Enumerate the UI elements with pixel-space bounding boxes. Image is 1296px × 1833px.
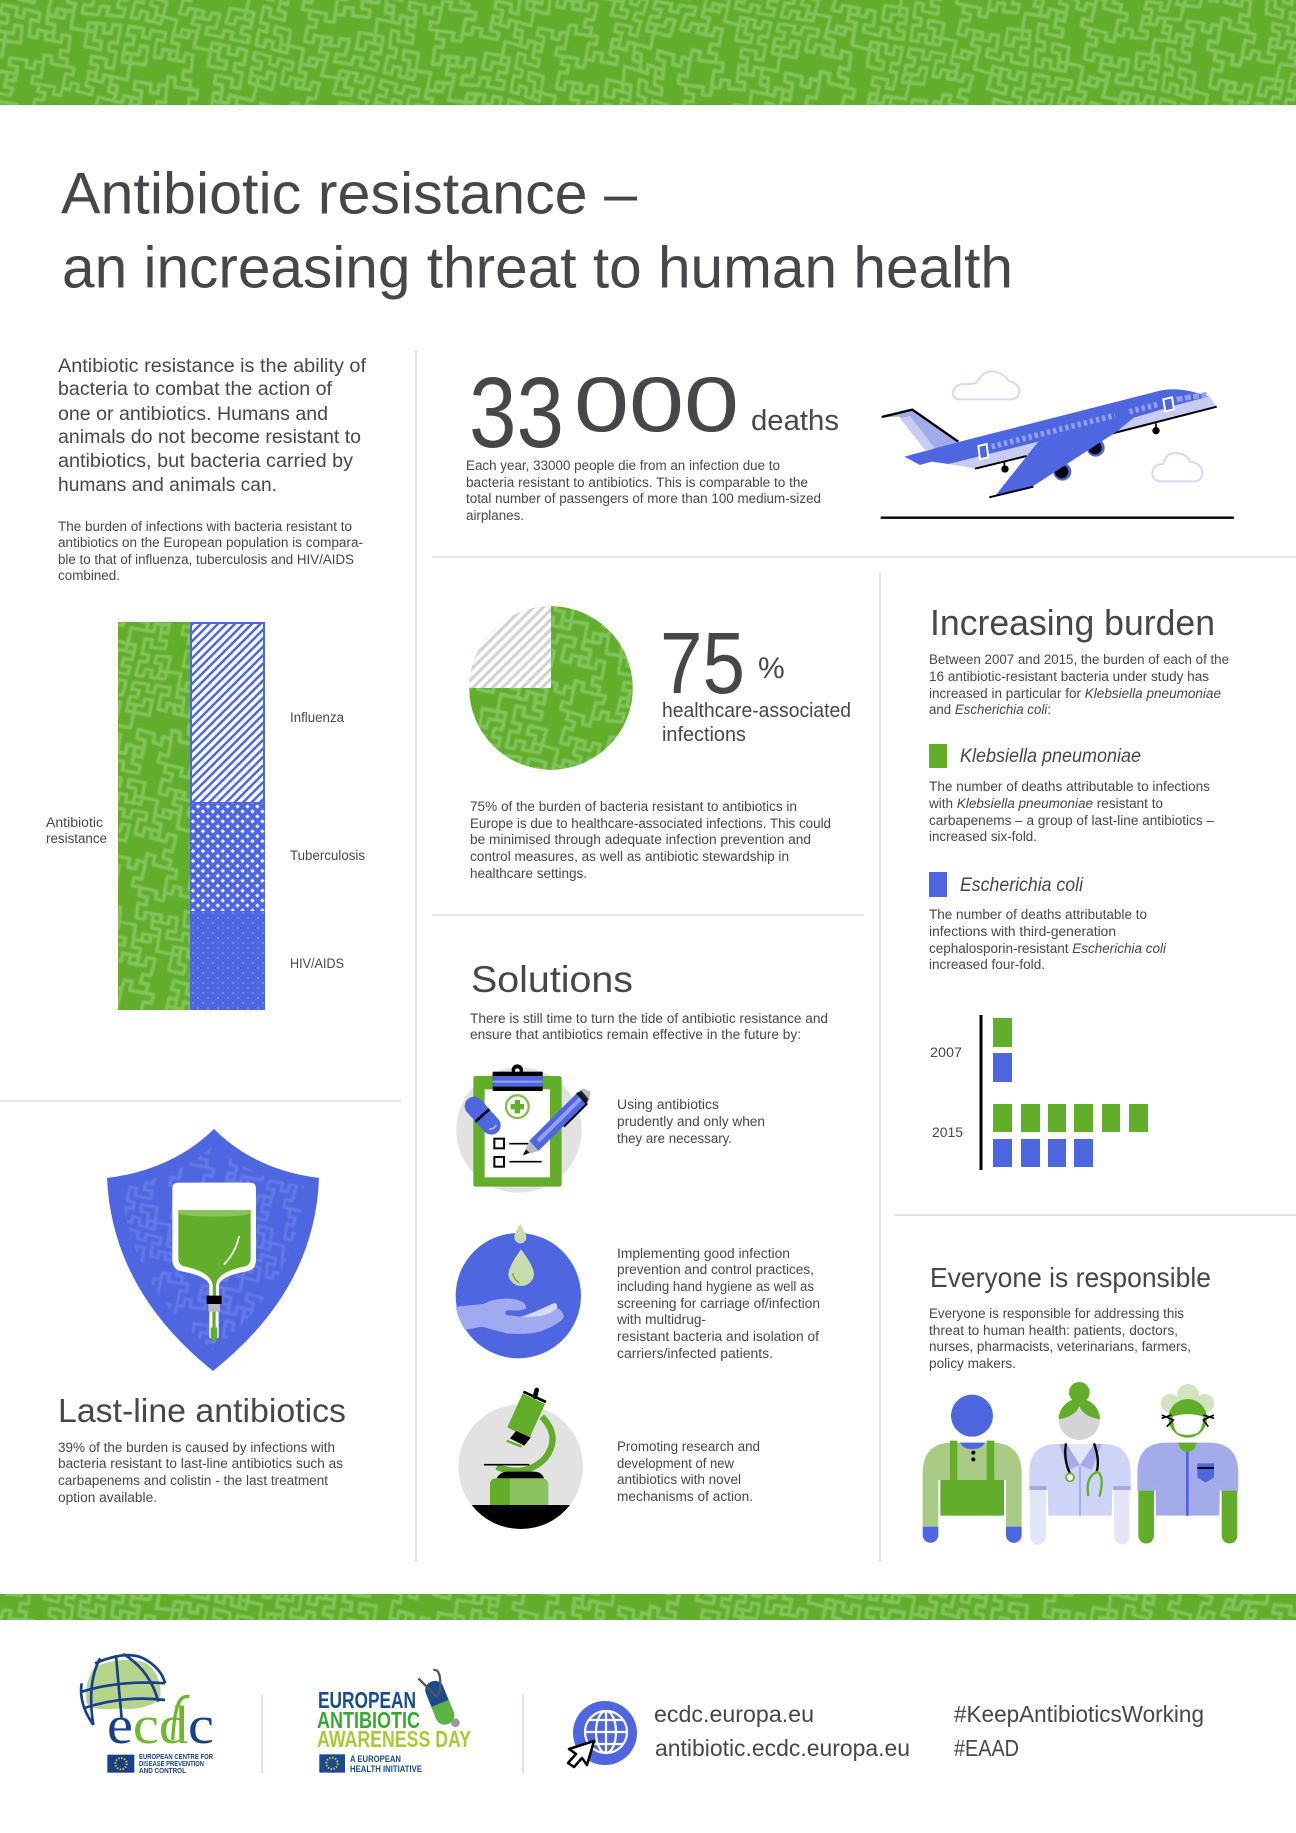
text: prudent use: prudently and only when: [617, 1114, 765, 1129]
logo: ECDC: EUROPEAN CENTRE FOR: [139, 1754, 213, 1761]
everyone text: nurses, pharmacists, veterinarians, farmers,: [929, 1339, 1191, 1354]
bar chart: 2007 vs 2015: 2007: [930, 1045, 962, 1060]
text: research: development of new: [617, 1456, 734, 1471]
title: an increasing threat to human health: [62, 236, 1013, 300]
icon: shield with IV bag: [107, 1129, 319, 1371]
logo: European Antibiotic Awareness Day: [317, 1670, 471, 1775]
healthcare infections text: healthcare settings.: [470, 866, 587, 881]
intro text: one or antibiotics. Humans and: [58, 403, 328, 425]
stacked burden chart: [46, 622, 365, 1010]
deaths text: [466, 458, 821, 523]
hashtags: [954, 1701, 1204, 1761]
big number: 33000 deaths: deaths: [751, 405, 839, 437]
intro text: bacteria to combat the action of: [58, 378, 333, 400]
big number: 33000 deaths: [469, 357, 839, 469]
big number: 33000 deaths: 33: [469, 357, 564, 469]
title: [61, 162, 1013, 300]
text: infection prevention: [616, 1246, 820, 1361]
footer pattern band: [0, 1594, 1296, 1620]
text: infection prevention: carriers/infected patients.: [617, 1346, 773, 1361]
Klebsiella text: with Klebsiella pneumoniae resistant to: [928, 796, 1163, 811]
website links: [654, 1701, 910, 1761]
deaths text: bacteria resistant to antibiotics. This is comparable to the: [466, 475, 808, 490]
intro text: humans and animals can.: [58, 474, 277, 496]
website links: ecdc.europa.eu: [654, 1701, 814, 1727]
intro text: Antibiotic resistance is the ability of: [58, 355, 367, 377]
logo: ECDC: AND CONTROL: [139, 1768, 187, 1775]
big number: 75%: 75: [660, 615, 745, 712]
big number: 75%: infections: [662, 724, 746, 746]
label: HIV/AIDS: HIV/AIDS: [290, 956, 344, 971]
last-line text: bacteria resistant to last-line antibiotics such as: [58, 1456, 343, 1471]
logo: ECDC: [81, 1654, 214, 1775]
logo: European Antibiotic Awareness Day: EUROPEAN: [318, 1687, 416, 1713]
text: prudent use: Using antibiotics: [617, 1097, 719, 1112]
website links: antibiotic.ecdc.europa.eu: [655, 1735, 910, 1761]
Escherichia text: [929, 907, 1167, 972]
healthcare infections text: be minimised through adequate infection prevention and: [470, 832, 811, 847]
pie chart: 75%: [469, 606, 633, 770]
everyone text: [929, 1306, 1191, 1371]
text: prudent use: [617, 1097, 765, 1146]
icon: web globe with cursor: [568, 1701, 637, 1767]
increasing burden text: increased in particular for Klebsiella pneumoniae: [929, 686, 1221, 701]
heading: last-line antibiotics: Last-line antibiotics: [58, 1392, 346, 1429]
deaths text: total number of passengers of more than 100 medium-sized: [466, 491, 821, 506]
text: infection prevention: with multidrug-: [616, 1312, 706, 1327]
text: infection prevention: prevention and control practices,: [617, 1262, 814, 1277]
text: research: antibiotics with novel: [617, 1472, 741, 1487]
healthcare infections text: [470, 799, 831, 881]
logo: ECDC: DISEASE PREVENTION: [139, 1761, 204, 1768]
label: tuberculosis: Tuberculosis: [290, 848, 365, 863]
solutions intro: [470, 1011, 828, 1042]
heading: increasing burden: Increasing burden: [930, 602, 1215, 643]
logo: European Antibiotic Awareness Day: HEALTH INITIATIVE: [350, 1764, 422, 1775]
big number: 33000 deaths: 000: [574, 360, 739, 448]
increasing burden text: Between 2007 and 2015, the burden of each of the: [929, 652, 1229, 667]
label: antibiotic resistance: resistance: [46, 831, 107, 846]
everyone text: policy makers.: [929, 1356, 1016, 1371]
big number: 75%: [660, 615, 851, 746]
Klebsiella text: carbapenems – a group of last-line antibiotics –: [929, 813, 1214, 828]
person: farmer: [923, 1395, 1022, 1543]
legend: Escherichia coli: Escherichia coli: [960, 875, 1084, 896]
bar: influenza: [191, 623, 264, 803]
legend: Klebsiella pneumoniae: Klebsiella pneumoniae: [960, 746, 1141, 767]
header pattern band: [0, 0, 1296, 105]
last-line text: 39% of the burden is caused by infections with: [58, 1440, 335, 1455]
bar: tuberculosis: [190, 803, 265, 911]
logo: ECDC: ecdc: [107, 1695, 214, 1755]
heading: solutions: Solutions: [471, 959, 633, 1000]
icon: airplane taking off: [881, 371, 1234, 518]
last-line text: [58, 1440, 343, 1505]
burden comparison text: [58, 519, 363, 583]
Klebsiella text: [928, 779, 1214, 844]
everyone text: threat to human health: patients, doctors,: [929, 1323, 1178, 1338]
burden comparison text: combined.: [58, 568, 120, 583]
Klebsiella text: increased six-fold.: [929, 829, 1037, 844]
hashtags: #KeepAntibioticsWorking: [954, 1701, 1204, 1727]
label: antibiotic resistance: [46, 815, 107, 846]
deaths text: airplanes.: [466, 508, 524, 523]
solutions intro: There is still time to turn the tide of antibiotic resistance and: [470, 1011, 828, 1026]
logo: European Antibiotic Awareness Day: ANTIBIOTIC: [317, 1707, 420, 1733]
bar: antibiotic resistance: [118, 622, 190, 1010]
logo: European Antibiotic Awareness Day: AWARENESS DAY: [317, 1726, 471, 1752]
last-line text: option available.: [58, 1490, 157, 1505]
legend: Escherichia coli: [929, 872, 1084, 897]
increasing burden text: and Escherichia coli:: [929, 702, 1051, 717]
person: doctor: [1029, 1382, 1131, 1545]
intro text: [58, 355, 367, 496]
big number: 75%: %: [758, 652, 785, 685]
burden comparison text: ble to that of influenza, tuberculosis and HIV/AIDS: [58, 552, 354, 567]
intro text: antibiotics, but bacteria carried by: [58, 450, 353, 472]
icon: microscope: [458, 1390, 583, 1529]
big number: 75%: healthcare-associated: [662, 700, 851, 722]
text: infection prevention: Implementing good infection: [617, 1246, 790, 1261]
increasing burden text: [929, 652, 1229, 717]
bar: HIV/AIDS: [190, 911, 265, 1010]
label: influenza: Influenza: [290, 710, 344, 725]
text: infection prevention: resistant bacteria and isolation of: [617, 1329, 819, 1344]
text: prudent use: they are necessary.: [617, 1131, 732, 1146]
healthcare infections text: control measures, as well as antibiotic stewardship in: [470, 849, 789, 864]
icon group: three people: [923, 1382, 1238, 1545]
Escherichia text: infections with third-generation: [929, 924, 1116, 939]
icon: hand and water drop: [456, 1224, 581, 1358]
healthcare infections text: Europe is due to healthcare-associated infections. This could: [470, 816, 831, 831]
Escherichia text: increased four-fold.: [929, 957, 1045, 972]
healthcare infections text: 75% of the burden of bacteria resistant to antibiotics in: [470, 799, 797, 814]
label: antibiotic resistance: Antibiotic: [46, 815, 103, 830]
logo: European Antibiotic Awareness Day: A EUROPEAN: [350, 1754, 401, 1765]
title: Antibiotic resistance –: [61, 162, 638, 226]
increasing burden text: 16 antibiotic-resistant bacteria under study has: [929, 669, 1209, 684]
burden comparison text: The burden of infections with bacteria resistant to: [58, 519, 352, 534]
intro text: animals do not become resistant to: [58, 426, 361, 448]
deaths text: Each year, 33000 people die from an infection due to: [466, 458, 780, 473]
everyone text: Everyone is responsible for addressing this: [929, 1306, 1184, 1321]
icon: clipboard, pill and pen: [456, 1064, 591, 1193]
text: infection prevention: screening for carriage of/infection: [617, 1296, 820, 1311]
text: research: mechanisms of action.: [617, 1489, 753, 1504]
Escherichia text: cephalosporin-resistant Escherichia coli: [929, 941, 1167, 956]
text: research: [617, 1439, 760, 1504]
bar chart: 2007 vs 2015: [930, 1015, 1148, 1170]
Klebsiella text: The number of deaths attributable to infections: [929, 779, 1210, 794]
last-line text: carbapenems and colistin - the last treatment: [58, 1473, 328, 1488]
solutions intro: ensure that antibiotics remain effective in the future by:: [470, 1027, 801, 1042]
person: surgeon: [1137, 1384, 1238, 1543]
text: research: Promoting research and: [617, 1439, 760, 1454]
heading: everyone is responsible: Everyone is responsible: [930, 1262, 1211, 1293]
bar chart: 2007 vs 2015: 2015: [932, 1125, 963, 1140]
Escherichia text: The number of deaths attributable to: [929, 907, 1147, 922]
hashtags: #EAAD: [954, 1735, 1019, 1761]
text: infection prevention: including hand hygiene as well as: [617, 1279, 814, 1294]
burden comparison text: antibiotics on the European population is compara-: [58, 535, 363, 550]
